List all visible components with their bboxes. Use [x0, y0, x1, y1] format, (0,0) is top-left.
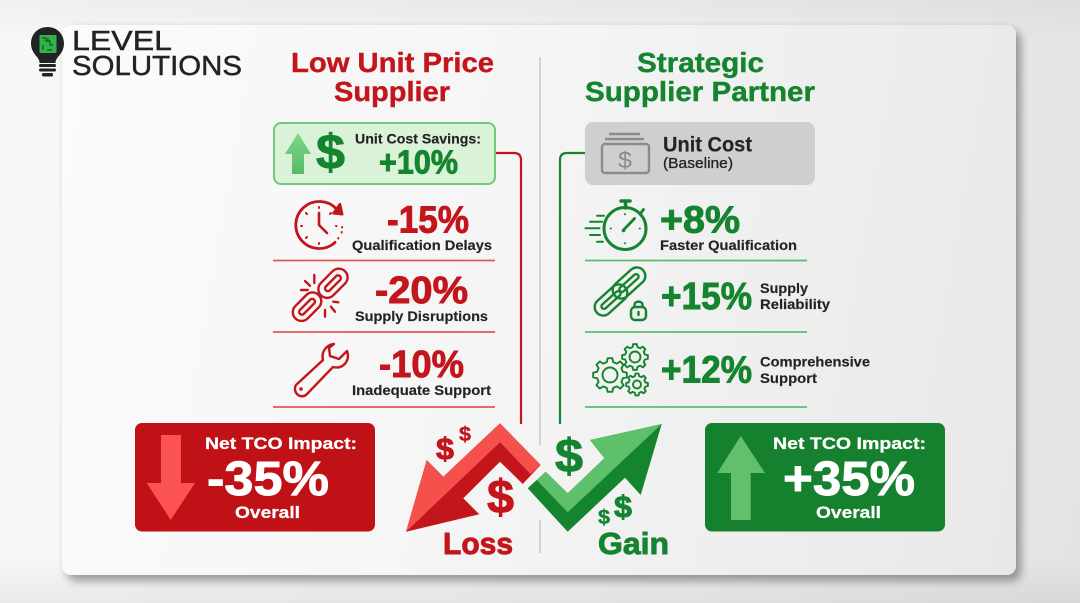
heading: strategic supplier partner: Strategic: [637, 47, 764, 78]
icon: dollar: $: [316, 126, 345, 180]
row: supply disruptions: [289, 265, 488, 325]
connector: green: [560, 153, 585, 424]
row: qualification delays: -15%: [387, 200, 469, 242]
icon: broken chain: [289, 265, 351, 325]
panel: unit cost baseline: (Baseline): [663, 156, 733, 172]
loss dollars: $: [436, 431, 454, 466]
row: supply reliability: Supply: [760, 280, 808, 296]
arrow: gain: $: [614, 489, 632, 524]
panel: net TCO impact negative: Overall: [235, 503, 300, 522]
icon: light bulb: [31, 27, 64, 76]
heading: low unit price supplier: Low Unit Price: [291, 47, 494, 78]
savings label: Unit Cost Savings:: [355, 130, 481, 146]
row: comprehensive support: Comprehensive: [760, 354, 870, 370]
row: inadequate support: Inadequate Support: [352, 382, 491, 398]
icon: clock: [296, 202, 342, 249]
row: supply reliability: Reliability: [760, 296, 830, 312]
connector: red: [496, 153, 521, 424]
arrow: loss: $: [487, 470, 514, 523]
row: comprehensive support: Support: [760, 370, 817, 386]
row: supply reliability: [591, 264, 830, 323]
heading: low unit price supplier: [291, 47, 494, 107]
row: qualification delays: [296, 200, 492, 253]
logo wordmark: [72, 25, 242, 81]
arrow: gain: [528, 424, 669, 561]
arrow: loss: $: [459, 424, 471, 446]
panel: net TCO impact negative: -35%: [207, 453, 329, 506]
row: supply disruptions: -20%: [375, 270, 468, 312]
icon: baseline dollar: $: [618, 147, 632, 173]
loss label: Loss: [443, 526, 513, 561]
icon: gears: [593, 344, 648, 395]
heading: strategic supplier partner: Supplier Partner: [585, 76, 815, 107]
icon: banknote stack: [602, 134, 649, 173]
panel: unit cost savings: [274, 123, 495, 184]
row: inadequate support: [295, 344, 491, 398]
icon: up arrow: [717, 436, 765, 520]
icon: down arrow: [147, 435, 195, 520]
icon: wrench: [295, 344, 348, 396]
row: faster qualification: [586, 200, 797, 253]
row: comprehensive support: [593, 344, 870, 395]
panel: net TCO impact positive: Net TCO Impact:: [773, 434, 926, 453]
row: qualification delays: Qualification Delays: [352, 237, 492, 253]
gain dollars: $: [555, 429, 583, 482]
row: supply reliability: +15%: [661, 276, 752, 318]
row: supply disruptions: Supply Disruptions: [355, 308, 488, 324]
row: comprehensive support: +12%: [661, 350, 752, 392]
panel: unit cost baseline: [585, 122, 815, 185]
panel: net TCO impact positive: +35%: [783, 453, 915, 506]
panel: net TCO impact positive: [705, 423, 945, 532]
icon: chain with lock: [591, 264, 650, 323]
panel: net TCO impact negative: Net TCO Impact:: [205, 434, 357, 453]
center divider: [539, 57, 541, 553]
gain label: Gain: [598, 526, 669, 561]
arrow: loss: [406, 423, 541, 561]
icon: stopwatch: [586, 201, 646, 250]
logo wordmark: LEVEL: [72, 25, 172, 56]
heading: strategic supplier partner: [585, 47, 815, 107]
row: inadequate support: -10%: [379, 344, 464, 386]
row: faster qualification: +8%: [660, 200, 740, 242]
icon: up arrow: [285, 133, 311, 174]
heading: low unit price supplier: Supplier: [334, 76, 450, 107]
panel: net TCO impact negative: [135, 423, 375, 532]
baseline label: Unit Cost: [663, 134, 752, 156]
logo wordmark: SOLUTIONS: [72, 50, 242, 81]
row: faster qualification: Faster Qualification: [660, 237, 797, 253]
arrow: gain: $: [598, 507, 610, 529]
logo: [31, 25, 242, 81]
savings value: +10%: [379, 144, 458, 180]
panel: net TCO impact positive: Overall: [816, 503, 881, 522]
